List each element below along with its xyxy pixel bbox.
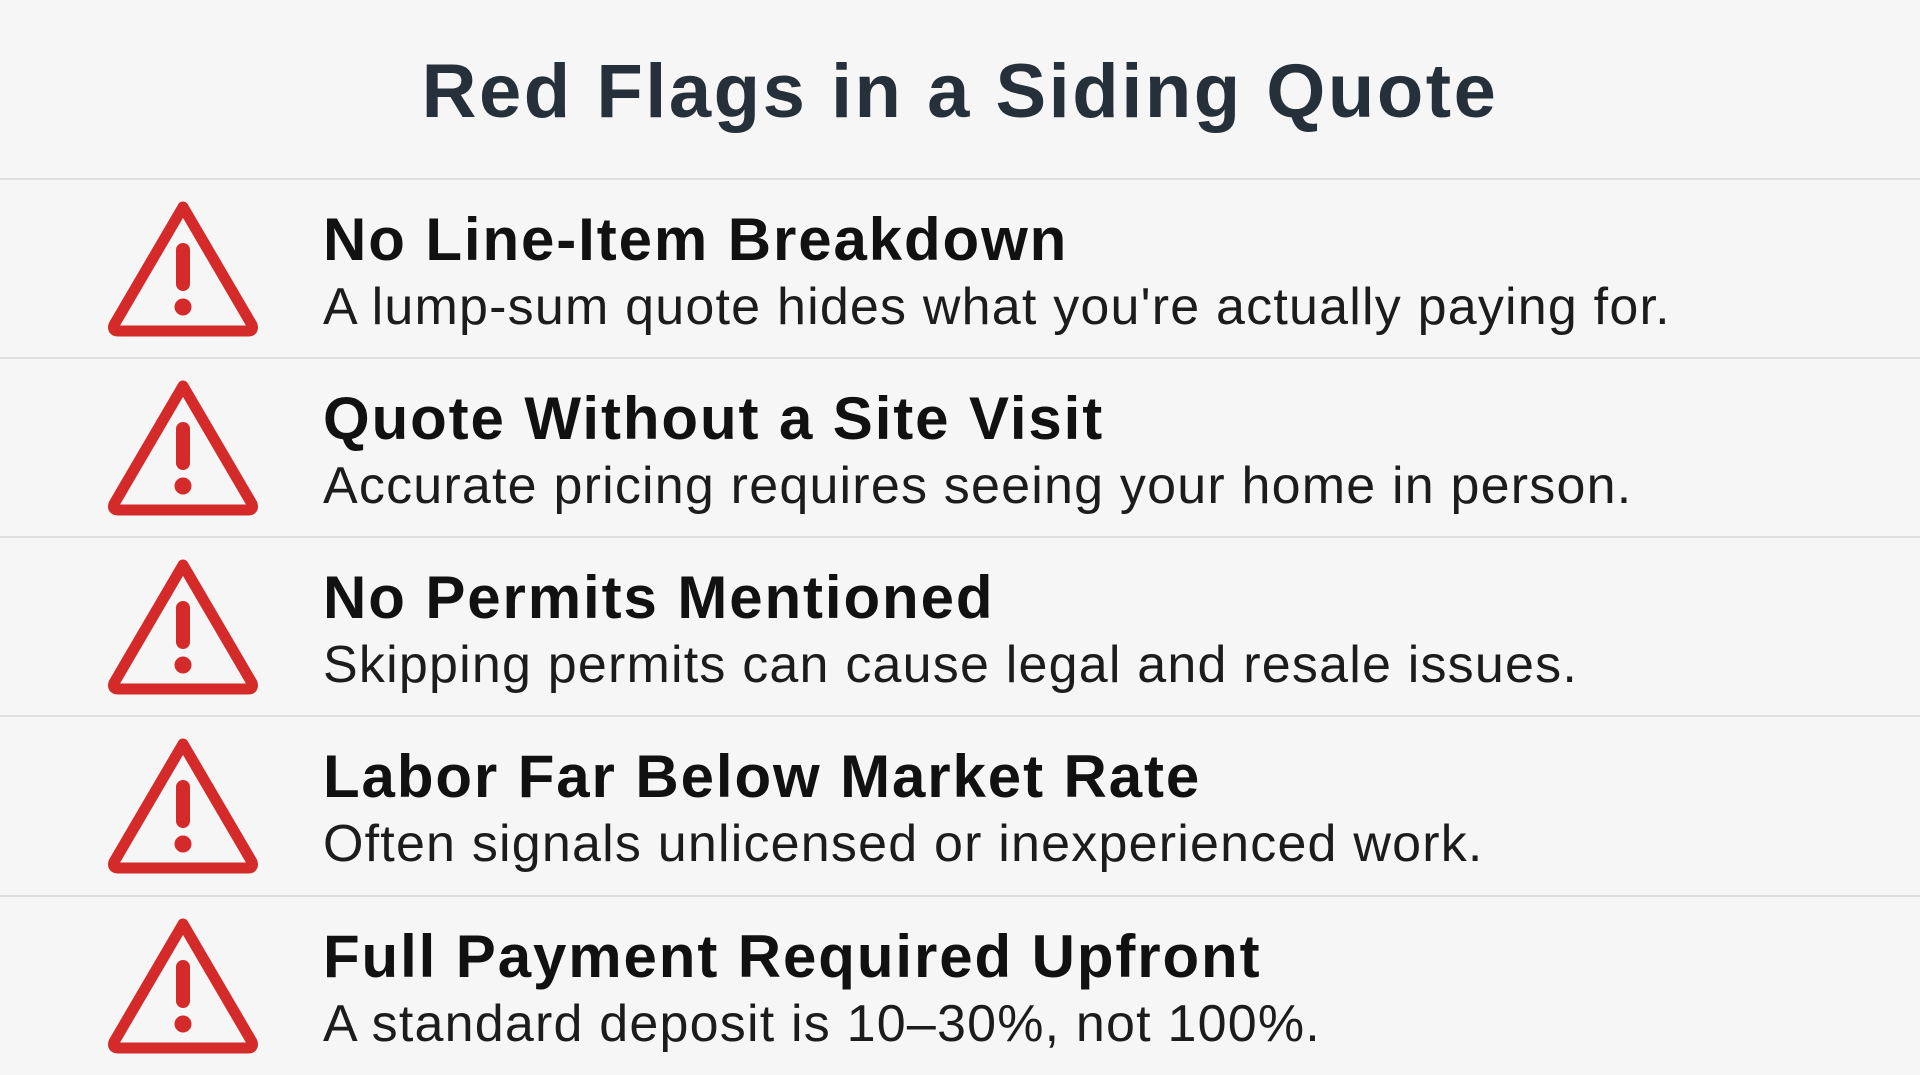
- icon: warning triangle: [108, 738, 258, 874]
- heading: Full Payment Required Upfront: [323, 923, 1262, 990]
- row: full payment upfront: [108, 918, 1321, 1054]
- row: quote without site visit: [108, 380, 1632, 516]
- row: no line-item breakdown: [108, 202, 1671, 336]
- title: Red Flags in a Siding Quote: [422, 49, 1498, 134]
- heading: Quote Without a Site Visit: [323, 385, 1104, 452]
- description: Often signals unlicensed or inexperienced work.: [323, 815, 1484, 873]
- icon: warning triangle: [108, 380, 258, 516]
- icon: warning triangle: [108, 202, 258, 336]
- icon: warning triangle: [108, 560, 258, 694]
- heading: Labor Far Below Market Rate: [323, 743, 1201, 810]
- row: no permits mentioned: [108, 560, 1578, 694]
- icon: warning triangle: [108, 918, 258, 1054]
- heading: No Line-Item Breakdown: [323, 206, 1068, 273]
- description: A standard deposit is 10–30%, not 100%.: [323, 995, 1321, 1053]
- row: labor far below market rate: [108, 738, 1484, 874]
- description: A lump-sum quote hides what you're actually paying for.: [323, 278, 1671, 336]
- description: Skipping permits can cause legal and resale issues.: [323, 636, 1578, 694]
- heading: No Permits Mentioned: [323, 564, 994, 631]
- description: Accurate pricing requires seeing your home in person.: [323, 457, 1632, 515]
